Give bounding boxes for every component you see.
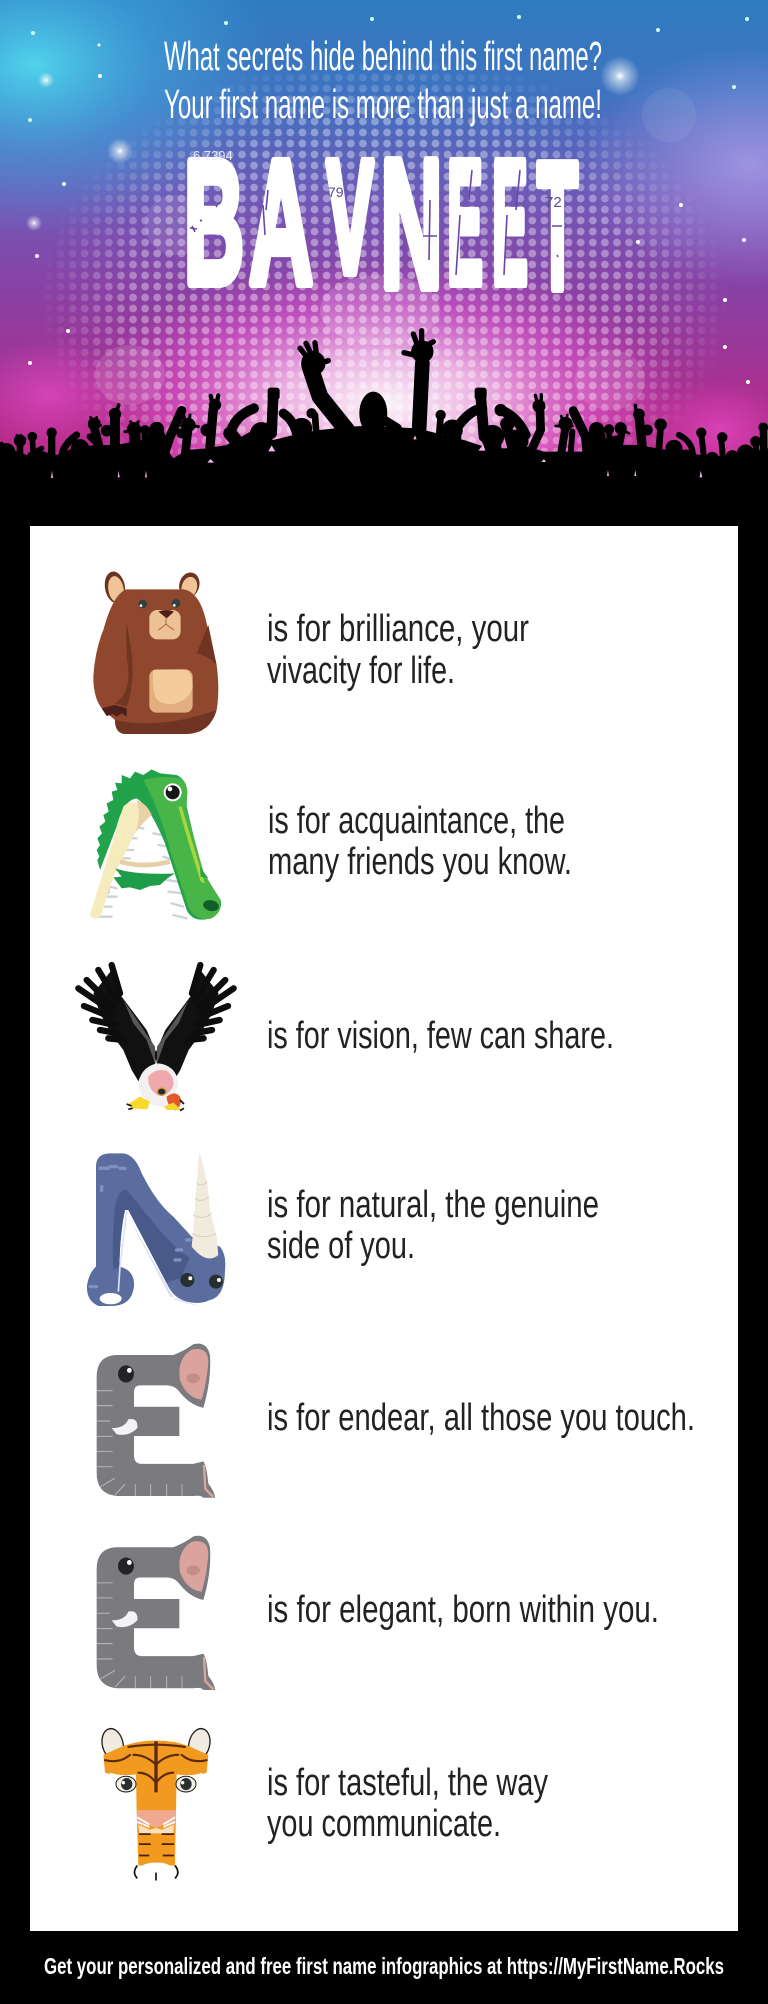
title: name BAVNEET: 72 [545,194,562,211]
row E: second elephant [97,1536,659,1690]
row N: narwhal [87,1152,599,1308]
icon: narwhal letter N [87,1152,225,1308]
text: T [537,126,578,327]
row V: vulture [78,965,614,1111]
text: T line: you communicate. [267,1803,501,1845]
text: T line: is for tasteful, the way [267,1762,548,1804]
crowd: right half [384,331,768,490]
title: name BAVNEET: 79 [328,184,344,200]
text: N line: is for natural, the genuine [267,1184,599,1226]
crowd silhouette [0,331,768,490]
crowd: left half [0,343,387,490]
text: B line [267,608,529,692]
text: V line: is for vision, few can share. [267,1015,614,1057]
text: A line: is for acquaintance, the [268,800,565,842]
icon: vulture letter V [78,965,234,1111]
icon: bear letter B [93,570,218,734]
text: second E line: is for elegant, born within you. [267,1589,659,1631]
text: N line: side of you. [267,1225,415,1267]
text: B line: vivacity for life. [267,650,455,692]
icon: crocodile letter A [90,769,221,920]
title: name BAVNEET: 6 7394 [193,148,233,163]
text: B line: is for brilliance, your [267,608,529,650]
title: name BAVNEET: E [447,125,483,321]
title: name BAVNEET: N [380,121,442,326]
header background [0,0,768,458]
title: name BAVNEET: V [326,127,374,306]
text: N line [267,1184,599,1267]
text: A line: many friends you know. [268,841,572,883]
text: A line [268,800,572,883]
icon: elephant letter E [97,1536,215,1690]
headline text [164,33,602,127]
row B: bear [93,570,529,734]
icon: elephant letter E [97,1344,215,1498]
title: name BAVNEET: A [249,125,313,321]
title: name BAVNEET: E [492,125,528,321]
row A: crocodile [90,769,572,920]
row T: tiger [99,1726,548,1882]
text: T line [267,1762,548,1845]
title: name BAVNEET: B [184,125,244,321]
icon: tiger letter T [99,1726,213,1882]
white content panel [30,526,738,1931]
title: name BAVNEET [184,121,578,327]
row E: first elephant [97,1344,695,1498]
